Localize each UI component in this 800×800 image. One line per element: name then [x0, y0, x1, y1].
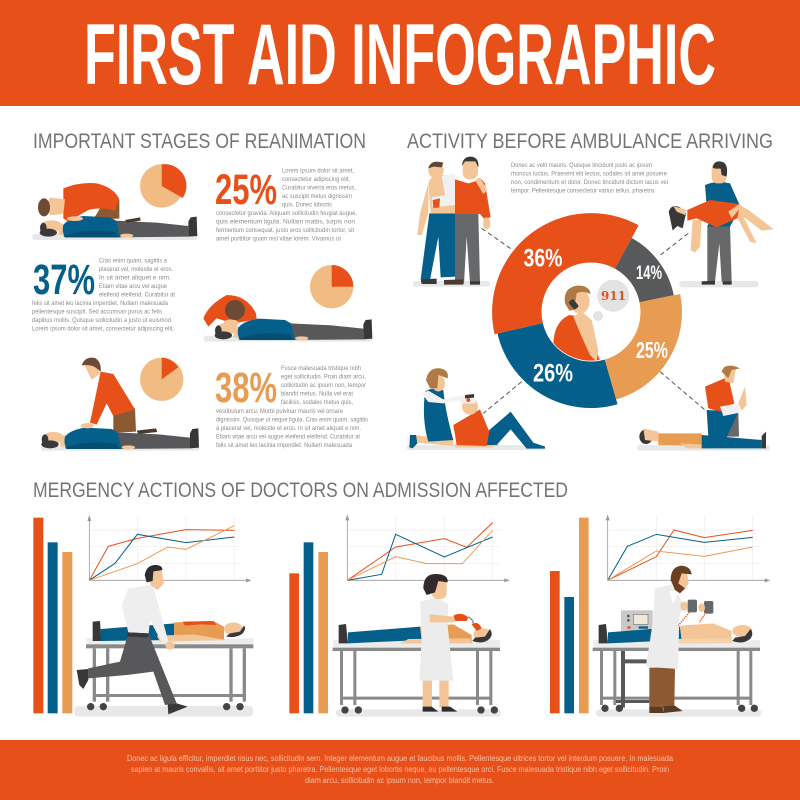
text block: ambulance intro: tempor. Pellentesque consectetur varius tellus, pharetra — [511, 188, 654, 194]
nurse — [419, 574, 482, 712]
text block: stage 1: Lorem ipsum dolor sit amet, — [282, 168, 354, 175]
text block: stage 2: dapibus mollis. Quisque sollicitudin a justo ut euismod — [32, 317, 171, 324]
panel: reanimation stage 1 — [32, 164, 357, 242]
text block: ambulance intro: non, condimentum et dolor. Donec tincidunt dictum lacus vel — [511, 179, 668, 186]
dashed connectors — [482, 228, 705, 413]
text block: stage 2: Cras enim quam, sagittis a — [99, 258, 167, 265]
segment: 26% — [498, 323, 618, 408]
pie: stage 2 — [310, 265, 353, 308]
text block: ambulance intro: Donec ac velit mauris. Quisque tincidunt justo ac ipsum — [511, 162, 652, 169]
bar chart — [33, 518, 72, 713]
text block: stage 2: felis sit amet leo lacinia imperdiet. Nullam malesuada — [32, 300, 168, 307]
text block: stage 1: amet porttitor quam nisl vitae lorem. Vivamus ut — [216, 236, 341, 242]
footer text: Donec ac ligula efficitur, imperdiet risus nec, sollicitudin sem. Integer elementum augue et faucibus mollis. Pellentesque ultrices tortor vel interdum posuere. In malesuada — [127, 754, 674, 763]
header banner — [0, 0, 800, 106]
text block: ambulance intro — [511, 162, 668, 194]
stat: 38%: 38% — [215, 364, 277, 412]
text block: stage 2: eleifend eleifend. Curabitur at — [99, 292, 175, 298]
text block: stage 2: Lorem ipsum dolor sit amet, consectetur adipiscing elit. — [32, 326, 174, 332]
label: 26%: 26% — [533, 360, 573, 388]
panel: reanimation stage 2 — [32, 256, 372, 342]
segment: 36% — [492, 213, 639, 334]
text block: stage 1: consectetur gravida. Aliquam sollicitudin feugiat augue, — [216, 210, 357, 217]
figure: helping bandaged man — [413, 157, 491, 287]
text block: stage 2: In sit amet aliquet e nim. — [99, 274, 171, 282]
text block: stage 2 — [32, 258, 175, 332]
figure: mouth-to-mouth — [203, 295, 372, 342]
heading: emergency actions: MERGENCY ACTIONS OF DOCTORS ON ADMISSION AFFECTED — [33, 479, 568, 502]
doctor with paddles — [646, 566, 713, 713]
figure: chest compressions — [41, 358, 199, 451]
text block: stage 3 — [216, 365, 369, 449]
panel: doctor with defibrillator — [550, 514, 770, 717]
text block: ambulance intro: rhoncus luctus. Praesent elit lectus, sodales sit amet posuere — [511, 170, 667, 178]
text block: stage 3: facilisis, sodales metus quis, — [281, 399, 353, 406]
text block: stage 1 — [216, 168, 357, 242]
text block: stage 1: ac suscipit metus dignissim — [282, 193, 352, 200]
label: 911: 911 — [601, 288, 626, 303]
gurney — [593, 640, 761, 717]
donut chart — [492, 213, 682, 408]
text block: stage 2: placerat vel, molestie et eros. — [99, 266, 173, 273]
text block: stage 1: consectetur adipiscing elit. — [282, 176, 350, 183]
text block: stage 3: eget sollicitudin. Proin diam arcu, — [281, 374, 366, 380]
label: 25%: 25% — [636, 337, 668, 363]
gurney — [74, 638, 253, 717]
icon: caller dialing 911 — [553, 280, 629, 365]
text block: stage 1: Curabitur viverra eros metus, — [282, 185, 356, 192]
footer text — [127, 754, 674, 785]
panel: doctor running with gurney — [33, 515, 253, 717]
panel: reanimation stage 3 — [41, 358, 369, 451]
pie: stage 1 — [140, 164, 186, 208]
pie: stage 3 — [140, 358, 183, 401]
figure: treating leg injury — [637, 366, 770, 451]
patient — [599, 623, 752, 644]
segment: 25% — [605, 294, 682, 400]
footer banner — [0, 740, 800, 800]
text block: stage 3: Fusce malesuada tristique nibh — [281, 365, 361, 372]
footer text: sapien at mauris convallis, sit amet porttitor justo pharetra. Pellentesque eget lobortis neque, eu pellentesque orci. Fusce malesuada tristique nibh eget sollicitudin. Proin — [131, 765, 669, 774]
text block: stage 2: pellentesque suscipit. Sed accumsan purus ac felis — [32, 308, 163, 316]
bar chart — [550, 518, 589, 713]
label: 36%: 36% — [524, 245, 562, 273]
text block: stage 3: dignissim. Quisque ut neque ligula. Cras enim quam, sagittis — [216, 416, 369, 424]
text block: stage 3: a placerat vel, molestie et eros. In sit amet aliquet e nim. — [216, 425, 361, 432]
stat: 25%: 25% — [215, 166, 277, 214]
bar chart — [289, 542, 328, 713]
doctor running — [77, 565, 188, 714]
figure: man carrying woman — [669, 161, 774, 287]
footer text: diam arcu, sollicitudin ac ipsum non, tempor blandit metus. — [305, 776, 494, 785]
heading: reanimation: IMPORTANT STAGES OF REANIMATION — [33, 130, 366, 153]
line chart — [606, 514, 770, 582]
patient — [93, 621, 245, 642]
text block: stage 3: sollicitudin ac ipsum non, tempor — [281, 382, 367, 389]
text block: stage 3: blandit metus. Nulla vel erat — [281, 390, 353, 398]
patient — [339, 624, 492, 643]
text block: stage 3: felis sit amet leo lacinia imperdiet. Nullam malesuada — [216, 442, 352, 449]
text block: stage 1: quis. Donec lobortis — [282, 202, 333, 208]
label: 14%: 14% — [636, 263, 662, 284]
figure: bandaging head wound — [407, 368, 545, 450]
stat: 37%: 37% — [33, 256, 95, 304]
gurney — [333, 640, 501, 717]
line chart — [87, 515, 252, 582]
figure: rescuer checking breathing — [32, 183, 198, 240]
line chart — [345, 514, 510, 582]
text block: stage 2: Etiam vitae arcu vel augue — [99, 283, 167, 290]
panel: nurse with oxygen mask — [289, 514, 510, 717]
defibrillator — [621, 610, 653, 631]
text block: stage 3: Etiam vitae arcu vel augue eleifend eleifend. Curabitur at — [216, 434, 360, 440]
segment: 14% — [615, 238, 674, 302]
text block: stage 1: quis elementum ligula. Nullam mattis, turpis non — [216, 218, 355, 226]
text block: stage 3: vestibulum arcu. Morbi pulvinar mauris vel ornare — [216, 408, 343, 415]
text block: stage 1: fermentum consequat, justo eros sollicitudin tortor, sit — [216, 227, 354, 234]
